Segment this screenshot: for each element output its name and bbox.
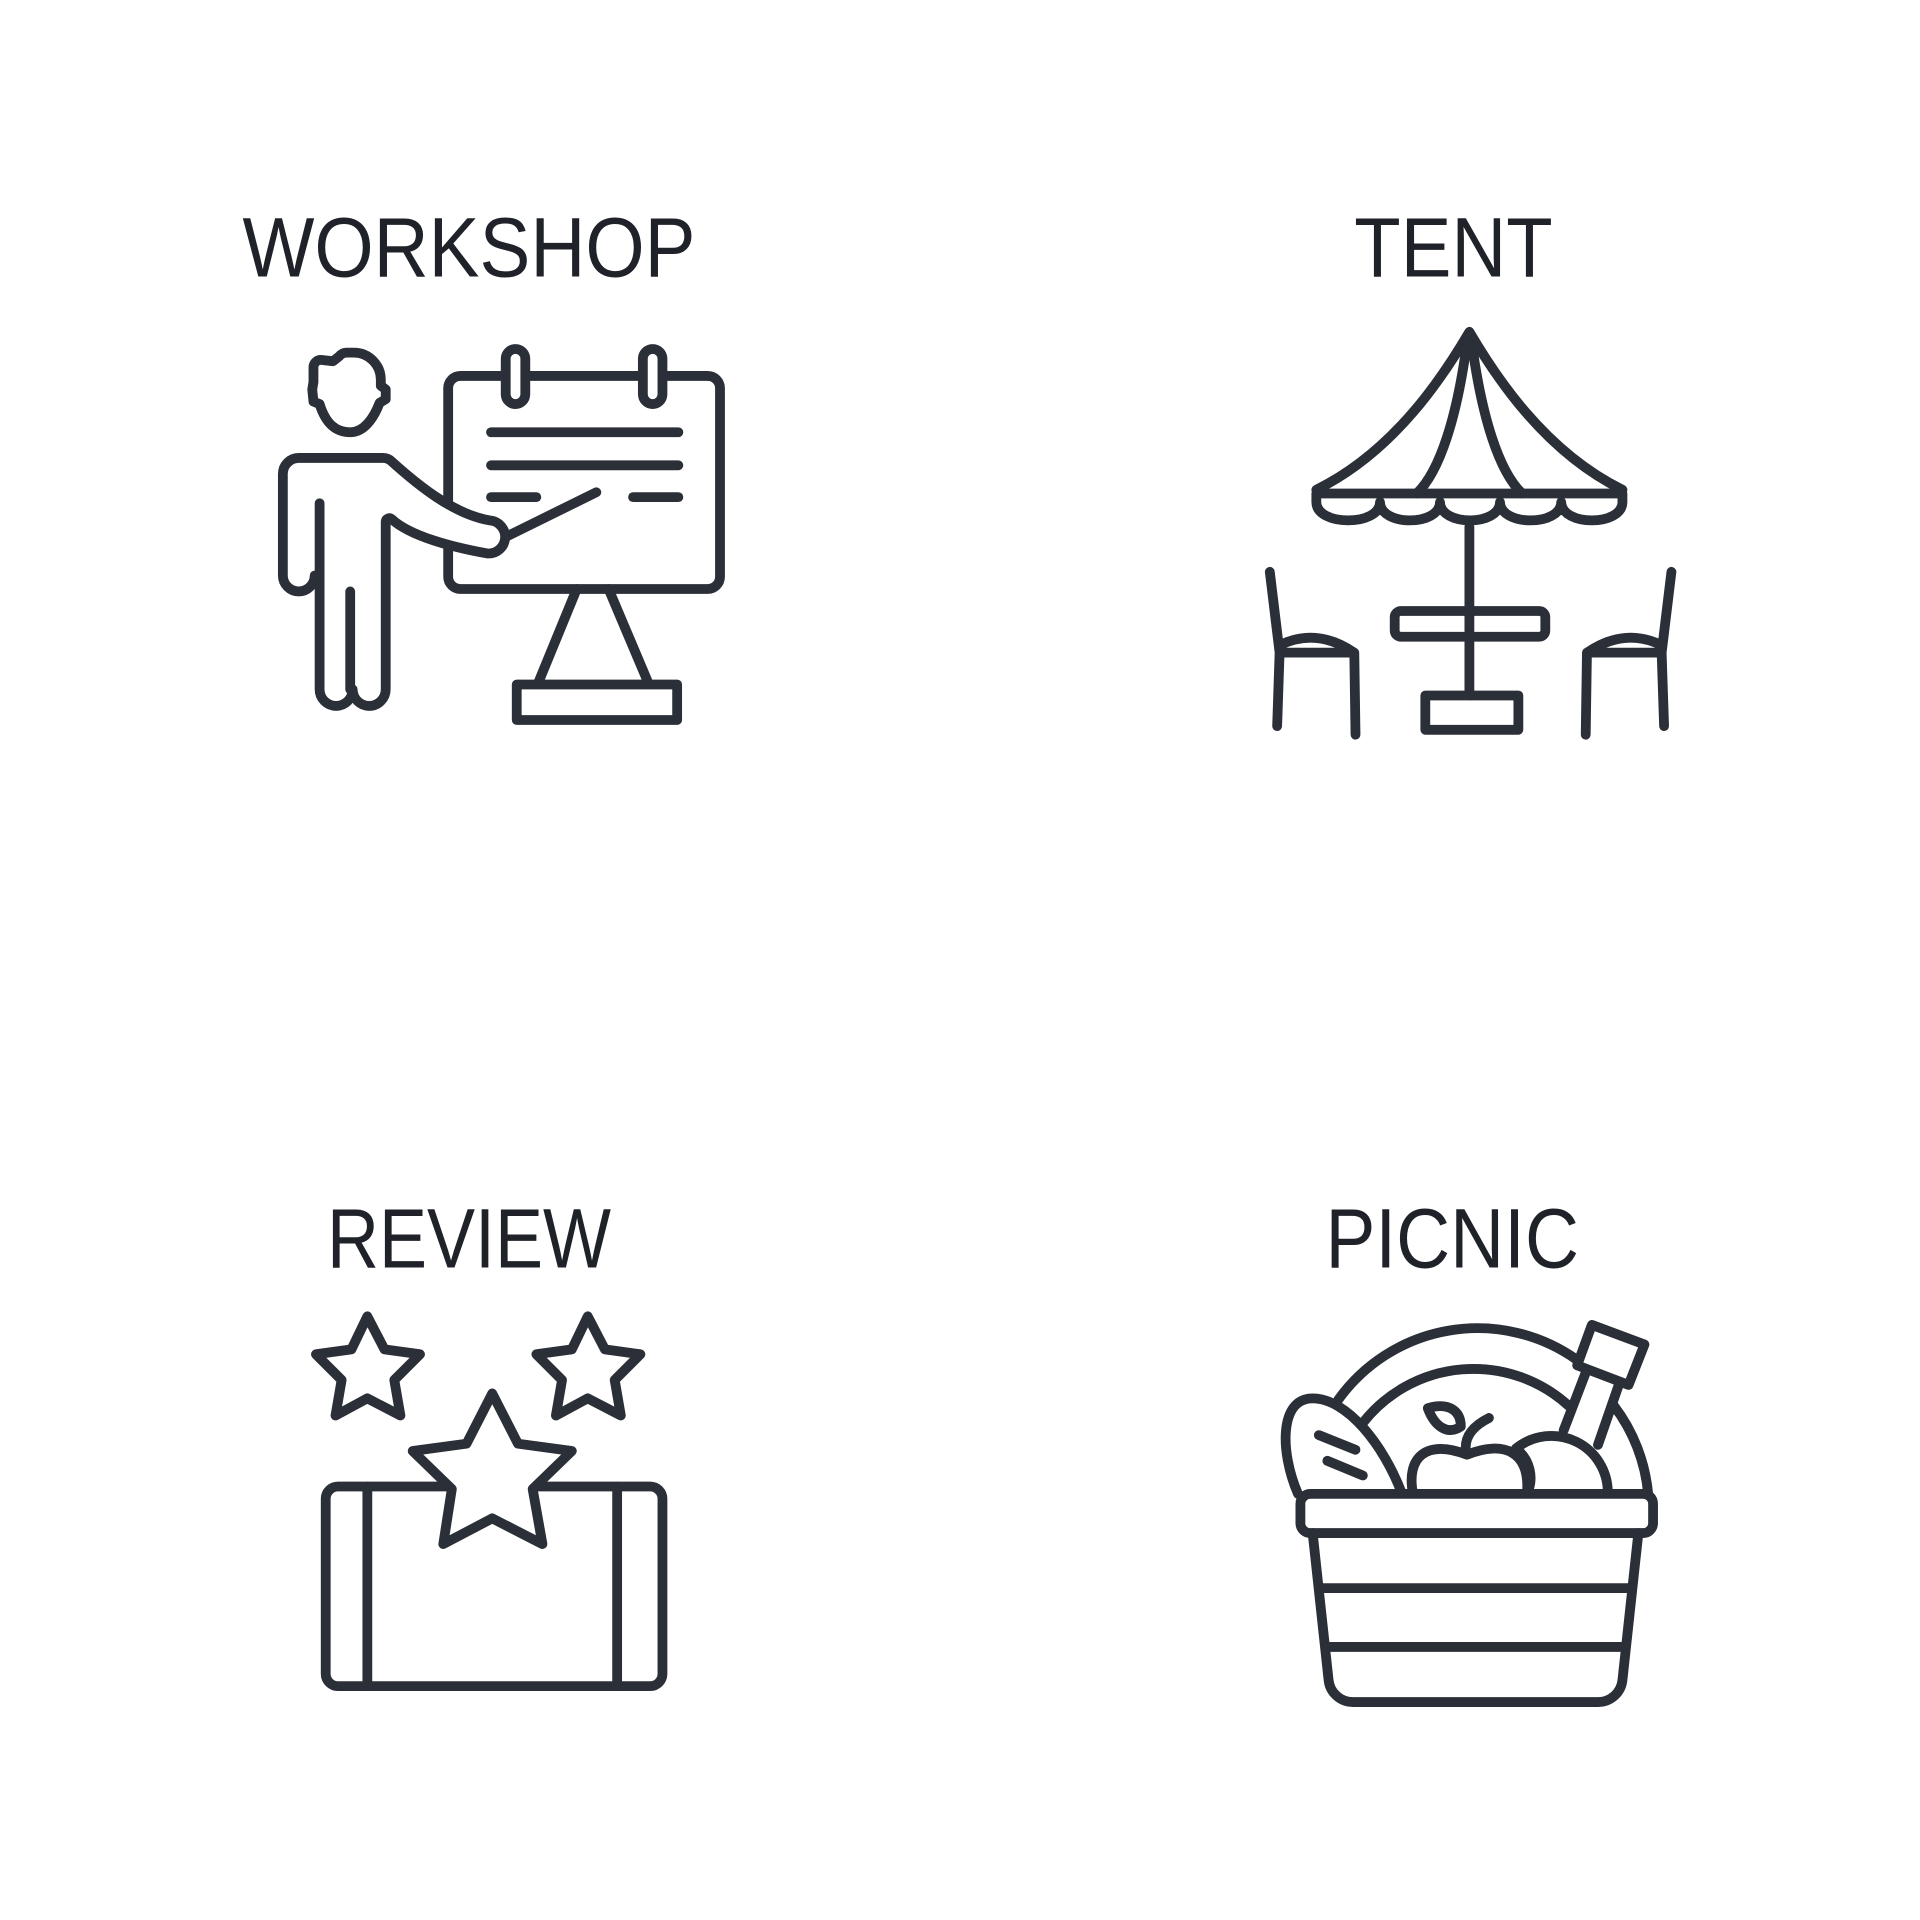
icon: picnic basket <box>1286 1325 1653 1702</box>
panel: tent <box>1270 201 1671 735</box>
panel: picnic <box>1286 1191 1653 1702</box>
heading: tent: TENT <box>1354 201 1553 295</box>
heading: review: REVIEW <box>327 1191 611 1285</box>
panel: workshop <box>242 201 720 720</box>
panel: review <box>316 1191 662 1686</box>
heading: workshop: WORKSHOP <box>242 201 696 295</box>
icon: umbrella table with chairs <box>1270 332 1671 735</box>
icon: presenter at board <box>283 349 720 720</box>
icon: stars over box <box>316 1316 662 1686</box>
heading: picnic: PICNIC <box>1326 1191 1579 1285</box>
